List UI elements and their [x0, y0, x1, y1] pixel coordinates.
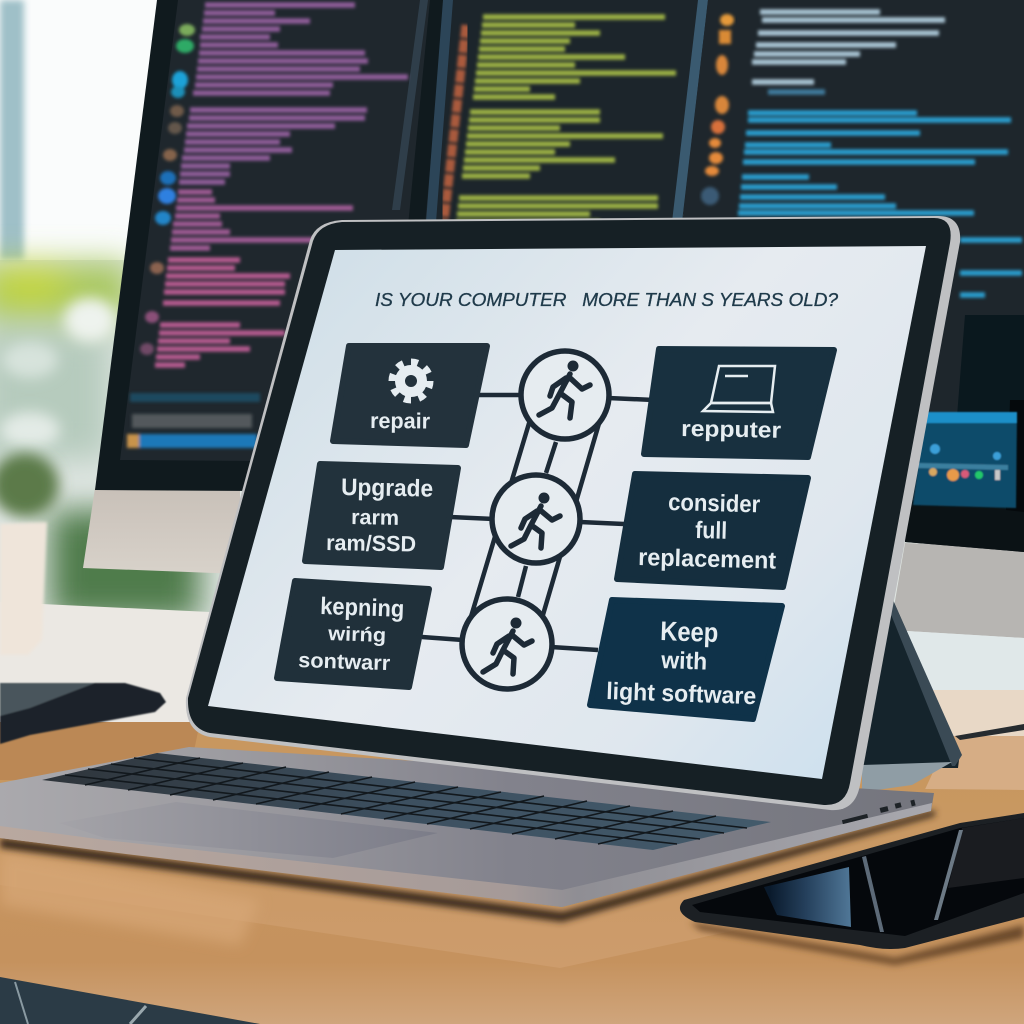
title: IS YOUR COMPUTER MORE THAN S YEARS OLD?	[375, 289, 839, 310]
card: keep with light software: with	[660, 647, 708, 676]
right monitor	[682, 0, 1024, 690]
card: consider full replacement: consider	[668, 489, 761, 518]
card: consider full replacement	[617, 474, 808, 587]
teal dashboard panel	[913, 412, 1017, 508]
sidebar dots: middle monitor	[444, 25, 466, 222]
icon: laptop	[703, 366, 775, 412]
laptop base with keyboard and trackpad	[0, 747, 935, 922]
shadow under laptop	[0, 810, 935, 922]
card: repair	[333, 346, 487, 445]
trackpad	[59, 802, 438, 858]
card: keep with light software: light software	[606, 678, 757, 710]
under-desk legs	[0, 977, 260, 1024]
side ports	[842, 800, 916, 824]
keyboard	[42, 753, 771, 850]
card: repputer	[644, 349, 834, 457]
card: consider full replacement: full	[695, 517, 728, 545]
tablet screen	[208, 246, 926, 779]
plant pot	[0, 453, 59, 655]
small object right	[955, 724, 1024, 740]
card: upgrade ram: Upgrade	[341, 474, 433, 503]
step circle 1 with runner icon	[521, 351, 609, 439]
card: consider full replacement: replacement	[638, 544, 777, 575]
card: upgrade ram	[305, 464, 458, 567]
card: upgrade ram: rarm	[351, 506, 399, 530]
tablet body	[186, 216, 960, 810]
icon: gear	[392, 362, 430, 400]
sidebar dots: right monitor	[701, 14, 734, 205]
card: keep with light software	[590, 600, 782, 719]
sidebar dots: left monitor	[127, 24, 260, 448]
card: repputer: repputer	[681, 416, 782, 443]
left monitor	[83, 0, 452, 574]
connector rails and links	[422, 395, 654, 650]
step circle 2 with runner icon	[492, 475, 580, 563]
code lines: right monitor	[738, 12, 1022, 295]
tablet stand	[862, 600, 962, 792]
card: keeping software: kepning	[320, 593, 405, 623]
smartphone on desk	[680, 813, 1024, 965]
code lines: left monitor	[155, 5, 408, 365]
card: keep with light software: Keep	[660, 616, 719, 648]
desk surface	[0, 602, 1024, 1024]
code lines: middle monitor	[456, 17, 676, 222]
middle monitor	[425, 0, 712, 225]
external keyboard	[0, 683, 166, 744]
phone glass reflection	[764, 867, 851, 927]
card: keeping software: sontwarr	[298, 649, 391, 675]
card: upgrade ram: ram/SSD	[326, 530, 416, 557]
card: keeping software: wirńg	[327, 623, 387, 647]
step circle 3 with runner icon	[462, 599, 552, 689]
card: keeping software	[277, 581, 429, 687]
card: repair: repair	[370, 408, 431, 434]
